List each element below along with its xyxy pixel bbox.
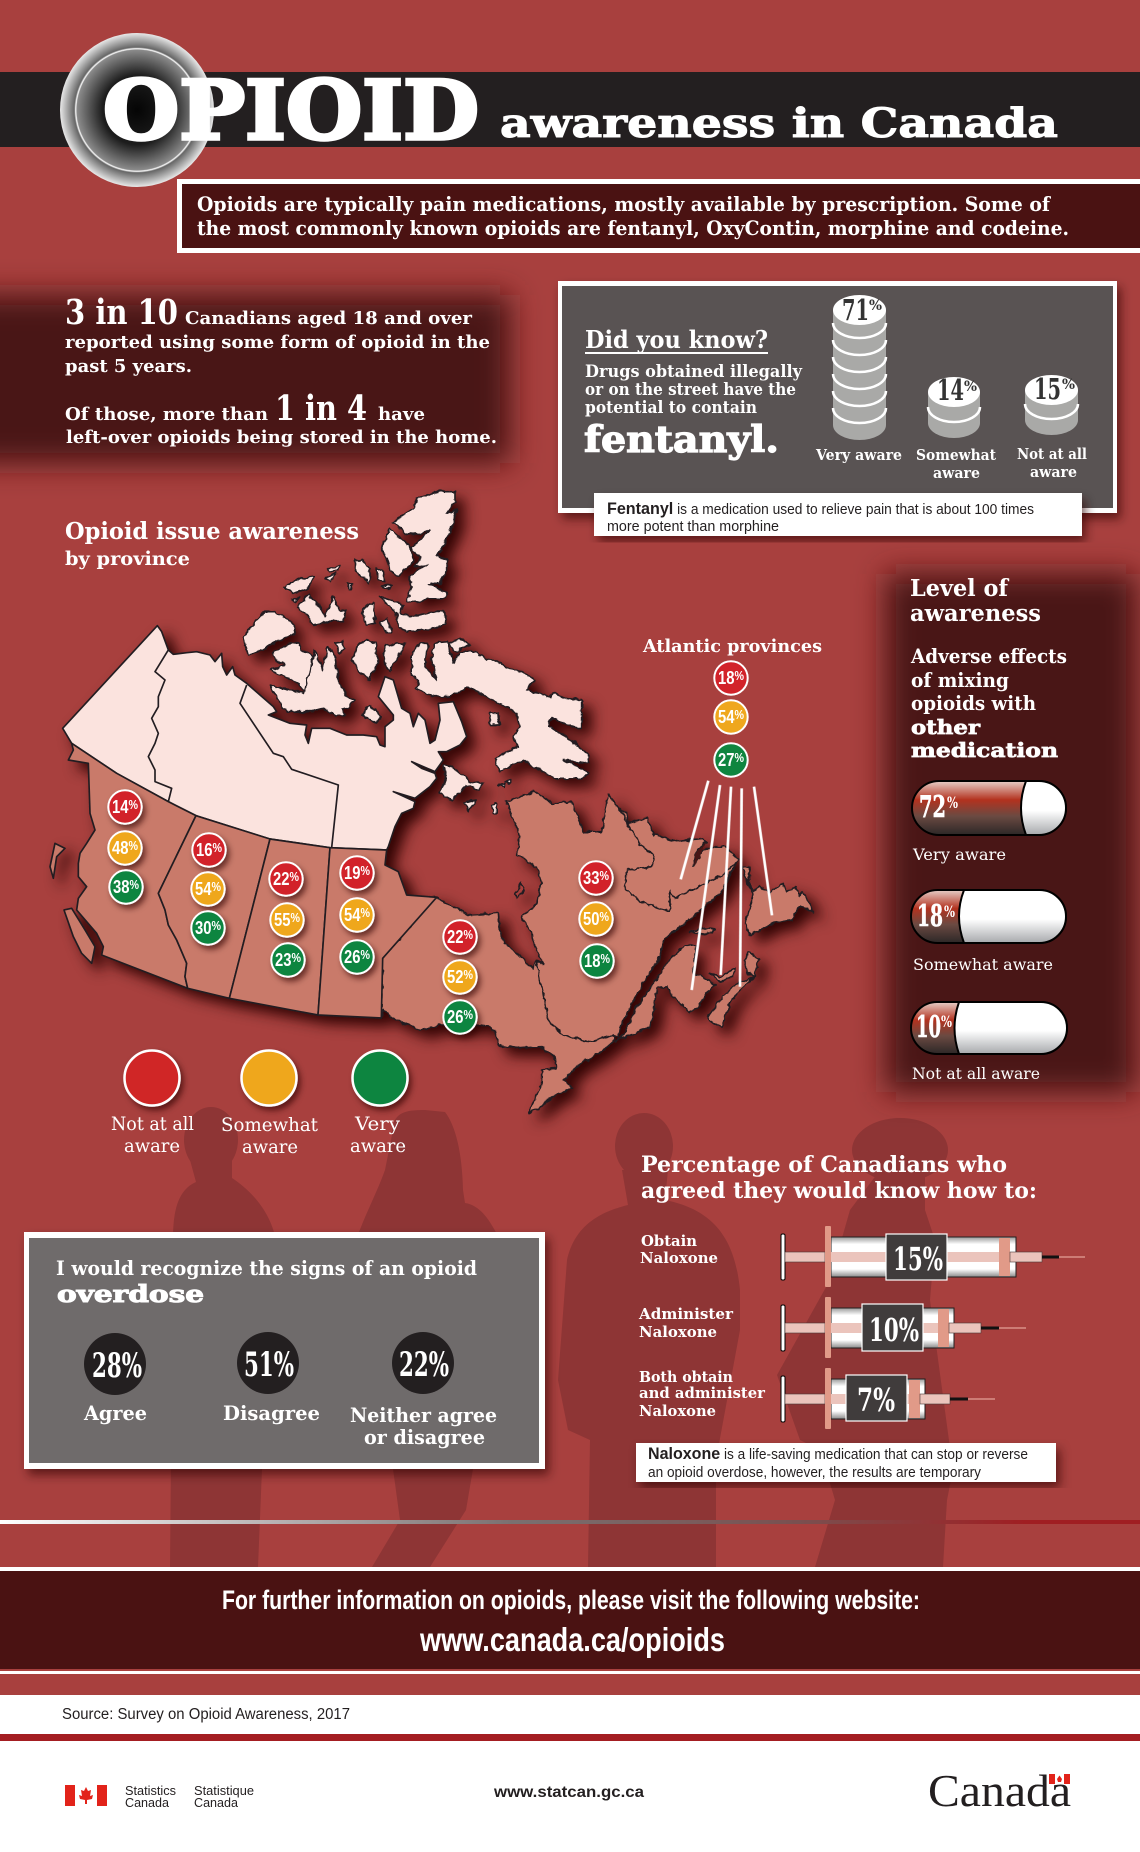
stat: 28% agree: Agree: [83, 1401, 147, 1425]
stat: 51% disagree: [223, 1332, 320, 1425]
badges: Manitoba: 19: [344, 863, 364, 883]
intro text box: the most commonly known opioids are fentanyl, OxyContin, morphine and codeine.: [197, 216, 1069, 240]
intro text box: [177, 179, 1140, 253]
stat: 22% neither: Neither agree: [350, 1403, 497, 1427]
badges: Quebec: %: [600, 951, 610, 966]
panel: did you know: Very aware: [815, 446, 902, 464]
icon: pill stack 14%: 14: [937, 373, 964, 407]
syringe: both obtain and administer: Naloxone: [639, 1402, 716, 1420]
icon: capsule 72%: 72: [919, 790, 946, 825]
panel: opioid use statistics: 3 in 10: [65, 292, 178, 333]
badges: Atlantic provinces: 27: [718, 750, 738, 770]
legend: aware: [350, 1135, 406, 1157]
panel: level of awareness: awareness: [910, 600, 1041, 627]
callout: naloxone definition: an opioid overdose, however, the results are temporary: [648, 1465, 982, 1481]
legend: [111, 1050, 408, 1158]
panel: opioid use statistics: past 5 years.: [65, 356, 192, 377]
legend: Very: [354, 1113, 400, 1135]
provinces: central and eastern: [381, 792, 813, 1113]
territories: mainland: [63, 626, 467, 850]
stat: 28% agree: [83, 1333, 147, 1425]
banner: further information: www.canada.ca/opioids: [419, 1621, 725, 1658]
badges: Saskatchewan: %: [289, 869, 299, 884]
panel: opioid use statistics: have: [378, 404, 425, 425]
stat: 22% neither: [350, 1332, 497, 1449]
heading: percentage of Canadians: [641, 1152, 1037, 1204]
map of Canada: [50, 492, 813, 1113]
badges: British Columbia: 38: [113, 877, 133, 897]
panel: opioid use statistics: Of those, more than: [65, 404, 268, 425]
badges: Alberta: %: [211, 879, 221, 894]
badges: Quebec: 50: [583, 909, 603, 929]
panel: did you know: fentanyl.: [584, 419, 779, 461]
badges: Saskatchewan: 22: [273, 869, 293, 889]
panel: recognize overdose: I would recognize the signs of an opioid: [56, 1256, 477, 1280]
syringe: both obtain and administer: [639, 1368, 995, 1429]
footer: www.statcan.gc.ca: [493, 1784, 644, 1801]
badges: Ontario: [443, 920, 477, 1034]
syringe: both obtain and administer: and administer: [639, 1384, 766, 1402]
panel: did you know: potential to contain: [585, 398, 757, 418]
panel: opioid use statistics: reported using some form of opioid in the: [65, 332, 490, 353]
badges: British Columbia: %: [128, 838, 138, 853]
syringe: obtain naloxone: 15%: [893, 1240, 943, 1278]
icon: capsule 72%: [912, 781, 1066, 835]
banner: further information: [0, 1567, 1140, 1674]
badges: Ontario: %: [463, 927, 473, 942]
icon: pill stack 14%: %: [964, 379, 977, 395]
icon: capsule 10%: %: [941, 1012, 952, 1031]
badges: Atlantic provinces: 54: [718, 707, 738, 727]
title banner: [0, 33, 1140, 187]
panel: did you know: Somewhat: [916, 446, 996, 464]
legend: Not at all: [111, 1113, 194, 1135]
panel: level of awareness: Very aware: [912, 845, 1006, 864]
badges: Quebec: 18: [584, 951, 604, 971]
badges: Ontario: 52: [447, 967, 467, 987]
syringe: obtain naloxone: Naloxone: [640, 1249, 718, 1267]
Canada wordmark: Canada: [928, 1765, 1071, 1816]
panel: level of awareness: opioids with: [911, 691, 1036, 715]
badges: Ontario: %: [463, 1007, 473, 1022]
badges: Ontario: 26: [447, 1007, 467, 1027]
syringe: administer naloxone: Administer: [638, 1305, 734, 1323]
panel: level of awareness: of mixing: [911, 668, 1009, 692]
panel: did you know: aware: [933, 464, 980, 482]
legend: Somewhat: [221, 1114, 318, 1136]
footer: Statistique: [194, 1784, 254, 1798]
footer: Canada: [125, 1796, 169, 1810]
panel: level of awareness: Not at all aware: [912, 1064, 1040, 1083]
icon: capsule 10%: [911, 1002, 1067, 1054]
icon: capsule 72%: %: [947, 793, 958, 812]
callout: fentanyl definition: [594, 493, 1082, 536]
icon: Canadian flag: [65, 1785, 107, 1806]
syringe: administer naloxone: [638, 1297, 1026, 1358]
badges: Manitoba: %: [360, 905, 370, 920]
arrows: atlantic pointer lines: [681, 781, 772, 990]
footer: [0, 1695, 1140, 1852]
icon: pill stack 15%: %: [1062, 377, 1075, 393]
panel: did you know: aware: [1030, 463, 1077, 481]
panel: level of awareness: medication: [911, 738, 1059, 762]
panel: did you know: Did you know?: [585, 325, 768, 354]
badges: Alberta: 16: [196, 840, 216, 860]
badges: Atlantic provinces: 18: [718, 668, 738, 688]
badges: Saskatchewan: 55: [274, 910, 294, 930]
panel: level of awareness: other: [911, 715, 981, 739]
badges: Manitoba: [340, 856, 374, 974]
syringe: obtain naloxone: [640, 1226, 1085, 1287]
footer: Canada: [194, 1796, 238, 1810]
badges: Manitoba: %: [360, 947, 370, 962]
badges: Alberta: [191, 833, 226, 945]
badges: Quebec: %: [599, 868, 609, 883]
panel: opioid use statistics: Canadians aged 18 and over: [185, 308, 473, 329]
badges: Ontario: 22: [447, 927, 467, 947]
panel: level of awareness: Adverse effects: [910, 644, 1067, 668]
icon: pill stack 15%: 15: [1034, 372, 1061, 406]
stat: 22% neither: or disagree: [364, 1425, 485, 1449]
stat: 51% disagree: Disagree: [223, 1401, 320, 1425]
badges: British Columbia: 14: [112, 797, 132, 817]
panel: opioid use statistics: [0, 292, 510, 463]
callout: naloxone definition: [636, 1443, 1056, 1482]
badges: Alberta: 54: [195, 879, 215, 899]
panel: did you know: Drugs obtained illegally: [585, 362, 803, 382]
badges: British Columbia: %: [129, 877, 139, 892]
badges: British Columbia: 48: [112, 838, 132, 858]
badges: Saskatchewan: %: [290, 910, 300, 925]
icon: capsule 18%: 18: [917, 899, 943, 934]
title banner: awareness in Canada: [500, 100, 1058, 147]
panel: opioid use statistics: left-over opioids being stored in the home.: [66, 427, 497, 448]
callout: fentanyl definition: Fentanyl is a medication used to relieve pain that is about 100 times: [607, 499, 1034, 518]
heading: opioid issue awareness: by province: [65, 548, 190, 570]
callout: fentanyl definition: more potent than morphine: [607, 519, 779, 535]
badges: Saskatchewan: 23: [275, 950, 295, 970]
badges: Saskatchewan: %: [291, 950, 301, 965]
badges: Alberta: %: [212, 840, 222, 855]
icon: pill stack 14%: [928, 373, 980, 438]
badges: British Columbia: %: [128, 797, 138, 812]
stat: 51% disagree: 51%: [244, 1345, 294, 1385]
badges: Manitoba: %: [360, 863, 370, 878]
heading: percentage of Canadians: Percentage of Canadians who: [641, 1152, 1007, 1178]
callout: naloxone definition: Naloxone is a life-saving medication that can stop or reverse: [648, 1444, 1028, 1463]
panel: did you know: [558, 281, 1117, 513]
legend: aware: [242, 1136, 298, 1158]
stat: 28% agree: 28%: [92, 1346, 142, 1386]
syringe: administer naloxone: Naloxone: [639, 1323, 717, 1341]
arctic islands: [243, 492, 590, 813]
badges: Quebec: %: [599, 909, 609, 924]
panel: did you know: or on the street have the: [585, 380, 796, 400]
icon: capsule 18%: %: [944, 902, 955, 921]
icon: capsule 18%: [911, 890, 1066, 943]
syringe: both obtain and administer: Both obtain: [639, 1368, 733, 1386]
panel: did you know: Not at all: [1017, 445, 1087, 463]
source note: Source: Survey on Opioid Awareness, 2017: [62, 1706, 350, 1723]
icon: pill stack 71%: %: [869, 298, 882, 314]
badges: Alberta: 30: [195, 918, 215, 938]
stat: 22% neither: 22%: [399, 1345, 449, 1385]
heading: atlantic provinces: Atlantic provinces: [642, 636, 822, 657]
silhouettes of people: [170, 1107, 953, 1567]
badges: Alberta: %: [211, 918, 221, 933]
panel: opioid use statistics: 1 in 4: [275, 388, 367, 429]
icon: pill stack 15%: [1025, 372, 1078, 435]
badges: Atlantic provinces: %: [734, 707, 744, 722]
heading: opioid issue awareness: Opioid issue awareness: [65, 518, 359, 545]
banner: further information: For further information on opioids, please visit the following website:: [222, 1585, 920, 1615]
panel: level of awareness: Somewhat aware: [913, 955, 1053, 974]
syringe: both obtain and administer: 7%: [857, 1381, 895, 1419]
intro text box: Opioids are typically pain medications, mostly available by prescription. Some of: [197, 192, 1051, 216]
badges: Manitoba: 26: [344, 947, 364, 967]
panel: level of awareness: [886, 574, 1136, 1092]
legend: aware: [124, 1135, 180, 1157]
provinces: western: [50, 743, 437, 1018]
footer: Statistics: [125, 1784, 176, 1798]
badges: Manitoba: 54: [344, 905, 364, 925]
icon: title disc: [60, 33, 214, 187]
icon: pill stack 71%: [833, 293, 886, 440]
heading: percentage of Canadians: agreed they would know how to:: [641, 1178, 1037, 1204]
title banner: OPIOID: [103, 64, 479, 159]
icon: capsule 10%: 10: [916, 1010, 941, 1045]
syringe: administer naloxone: 10%: [869, 1311, 919, 1349]
badges: British Columbia: [108, 790, 143, 904]
panel: level of awareness: Level of: [910, 575, 1010, 602]
badges: Atlantic provinces: %: [734, 750, 744, 765]
syringe: obtain naloxone: Obtain: [641, 1232, 697, 1250]
badges: Quebec: [579, 861, 614, 978]
heading: opioid issue awareness: [65, 518, 359, 570]
badges: Atlantic provinces: %: [734, 668, 744, 683]
badges: Saskatchewan: [269, 862, 305, 977]
panel: recognize overdose: overdose: [57, 1281, 204, 1308]
panel: recognize overdose: [24, 1232, 545, 1469]
badges: Atlantic provinces: [714, 661, 748, 777]
badges: Ontario: %: [463, 967, 473, 982]
icon: pill stack 71%: 71: [842, 293, 869, 327]
badges: Quebec: 33: [583, 868, 603, 888]
